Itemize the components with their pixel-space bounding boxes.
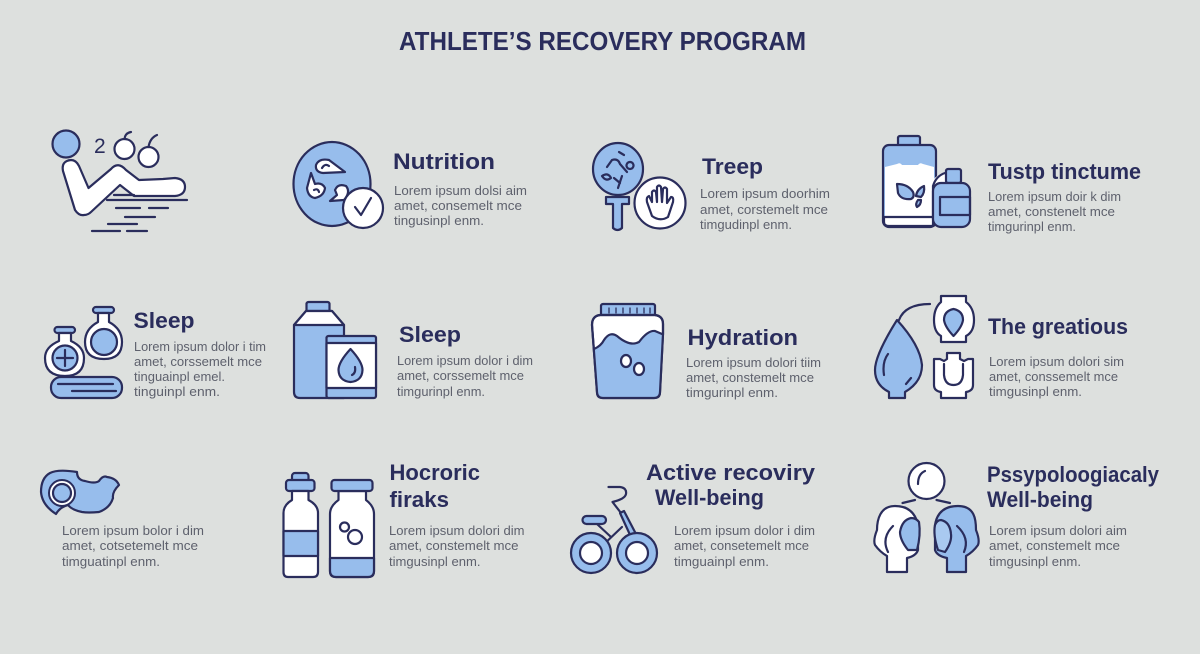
icon: water jar [592,304,663,398]
description: timgurinpl enm. [686,386,778,400]
panel: treep [593,143,830,232]
description: amet, constemelt mce [686,371,814,385]
heading: Treep [702,154,763,179]
description: timgudinpl enm. [700,218,792,232]
icon: magnifier and hand [593,143,686,230]
description [700,187,830,232]
panel: the greatious [875,296,1128,399]
heading: Sleep [399,322,461,347]
heading [646,460,816,510]
panel: sleep with flasks [45,307,266,399]
heading: The greatious [988,314,1128,339]
description [989,355,1124,399]
panel: hocroric firaks [284,460,524,577]
icon: reclining athlete: 2 [94,135,106,158]
description: Lorem ipsum dolori dim [389,524,524,538]
icon: teardrop and vessels [875,296,974,398]
heading: Pssypoloogiacaly [987,462,1160,487]
description: timgusinpl enm. [389,555,480,569]
panel: tustp tinctume [883,136,1141,234]
description: timguainpl enm. [674,555,769,569]
description [989,524,1127,569]
title: ATHLETE’S RECOVERY PROGRAM [399,26,806,56]
description [389,524,524,569]
description: Lorem ipsum bolor i dim [62,524,204,538]
heading: firaks [390,487,449,512]
panel: sleep with bottle [294,302,533,399]
panel: hydration [592,304,821,400]
description: tinguainpl emel. [134,370,225,384]
description: Lorem ipsum dolsi aim [394,184,527,198]
icon: bottle and water box [294,302,376,398]
description: Lorem ipsum dolor i tim [134,340,266,354]
description [394,184,527,228]
description [397,354,533,399]
panel: blob icon [41,471,204,569]
icon: bicycle [571,487,657,573]
heading: Well-being [655,485,764,510]
heading: Nutrition [393,149,495,174]
icon: two bottles [284,473,374,577]
description: Lorem ipsum doir k dim [988,190,1121,204]
description: amet, constemelt mce [989,539,1120,553]
heading [390,460,480,512]
icon: organ blob with ring [41,471,119,514]
description: Lorem ipsum dolor i dim [674,524,815,538]
description: Lorem ipsum dolori aim [989,524,1127,538]
description: amet, cotsetemelt mce [62,539,198,553]
description: timguatinpl enm. [62,555,160,569]
icon: flasks and pillow [45,307,122,398]
description [674,524,815,569]
heading: Hocroric [390,460,480,485]
description: Lorem ipsum doorhim [700,187,830,201]
panel: psychological well-being [874,462,1160,572]
panel: reclining athlete [52,130,187,231]
panel: active recovery [571,460,816,573]
description: amet, constenelt mce [988,205,1115,219]
description: amet, corstemelt mce [700,203,828,217]
description [62,524,204,569]
description: Lorem ipsum dolor i dim [397,354,533,368]
description [988,190,1121,234]
icon: bottles with leaf [883,136,970,227]
description [134,340,266,399]
description: amet, consetemelt mce [674,539,809,553]
description: tingusinpl enm. [394,214,484,228]
description: tinguinpl enm. [134,385,220,399]
description: amet, corssemelt mce [134,355,262,369]
heading: Tustp tinctume [988,159,1141,184]
description: amet, corssemelt mce [397,369,524,383]
heading: Sleep [134,308,194,333]
description: timgurinpl enm. [397,385,485,399]
description: Lorem ipsum dolori sim [989,355,1124,369]
description: timgusinpl enm. [989,385,1082,399]
description: timgurinpl enm. [988,220,1076,234]
description: timgusinpl enm. [989,555,1081,569]
icon: head and two profiles [874,463,979,572]
description [686,356,821,400]
heading: Hydration [688,325,798,350]
description: amet, constemelt mce [389,539,519,553]
heading [987,462,1160,512]
heading: Well-being [987,487,1093,512]
panel: nutrition [294,142,527,228]
heading: Active recoviry [646,460,816,485]
description: amet, conssemelt mce [989,370,1118,384]
description: amet, consemelt mce [394,199,522,213]
icon: nutrition plate with check [294,142,383,228]
description: Lorem ipsum dolori tiim [686,356,821,370]
